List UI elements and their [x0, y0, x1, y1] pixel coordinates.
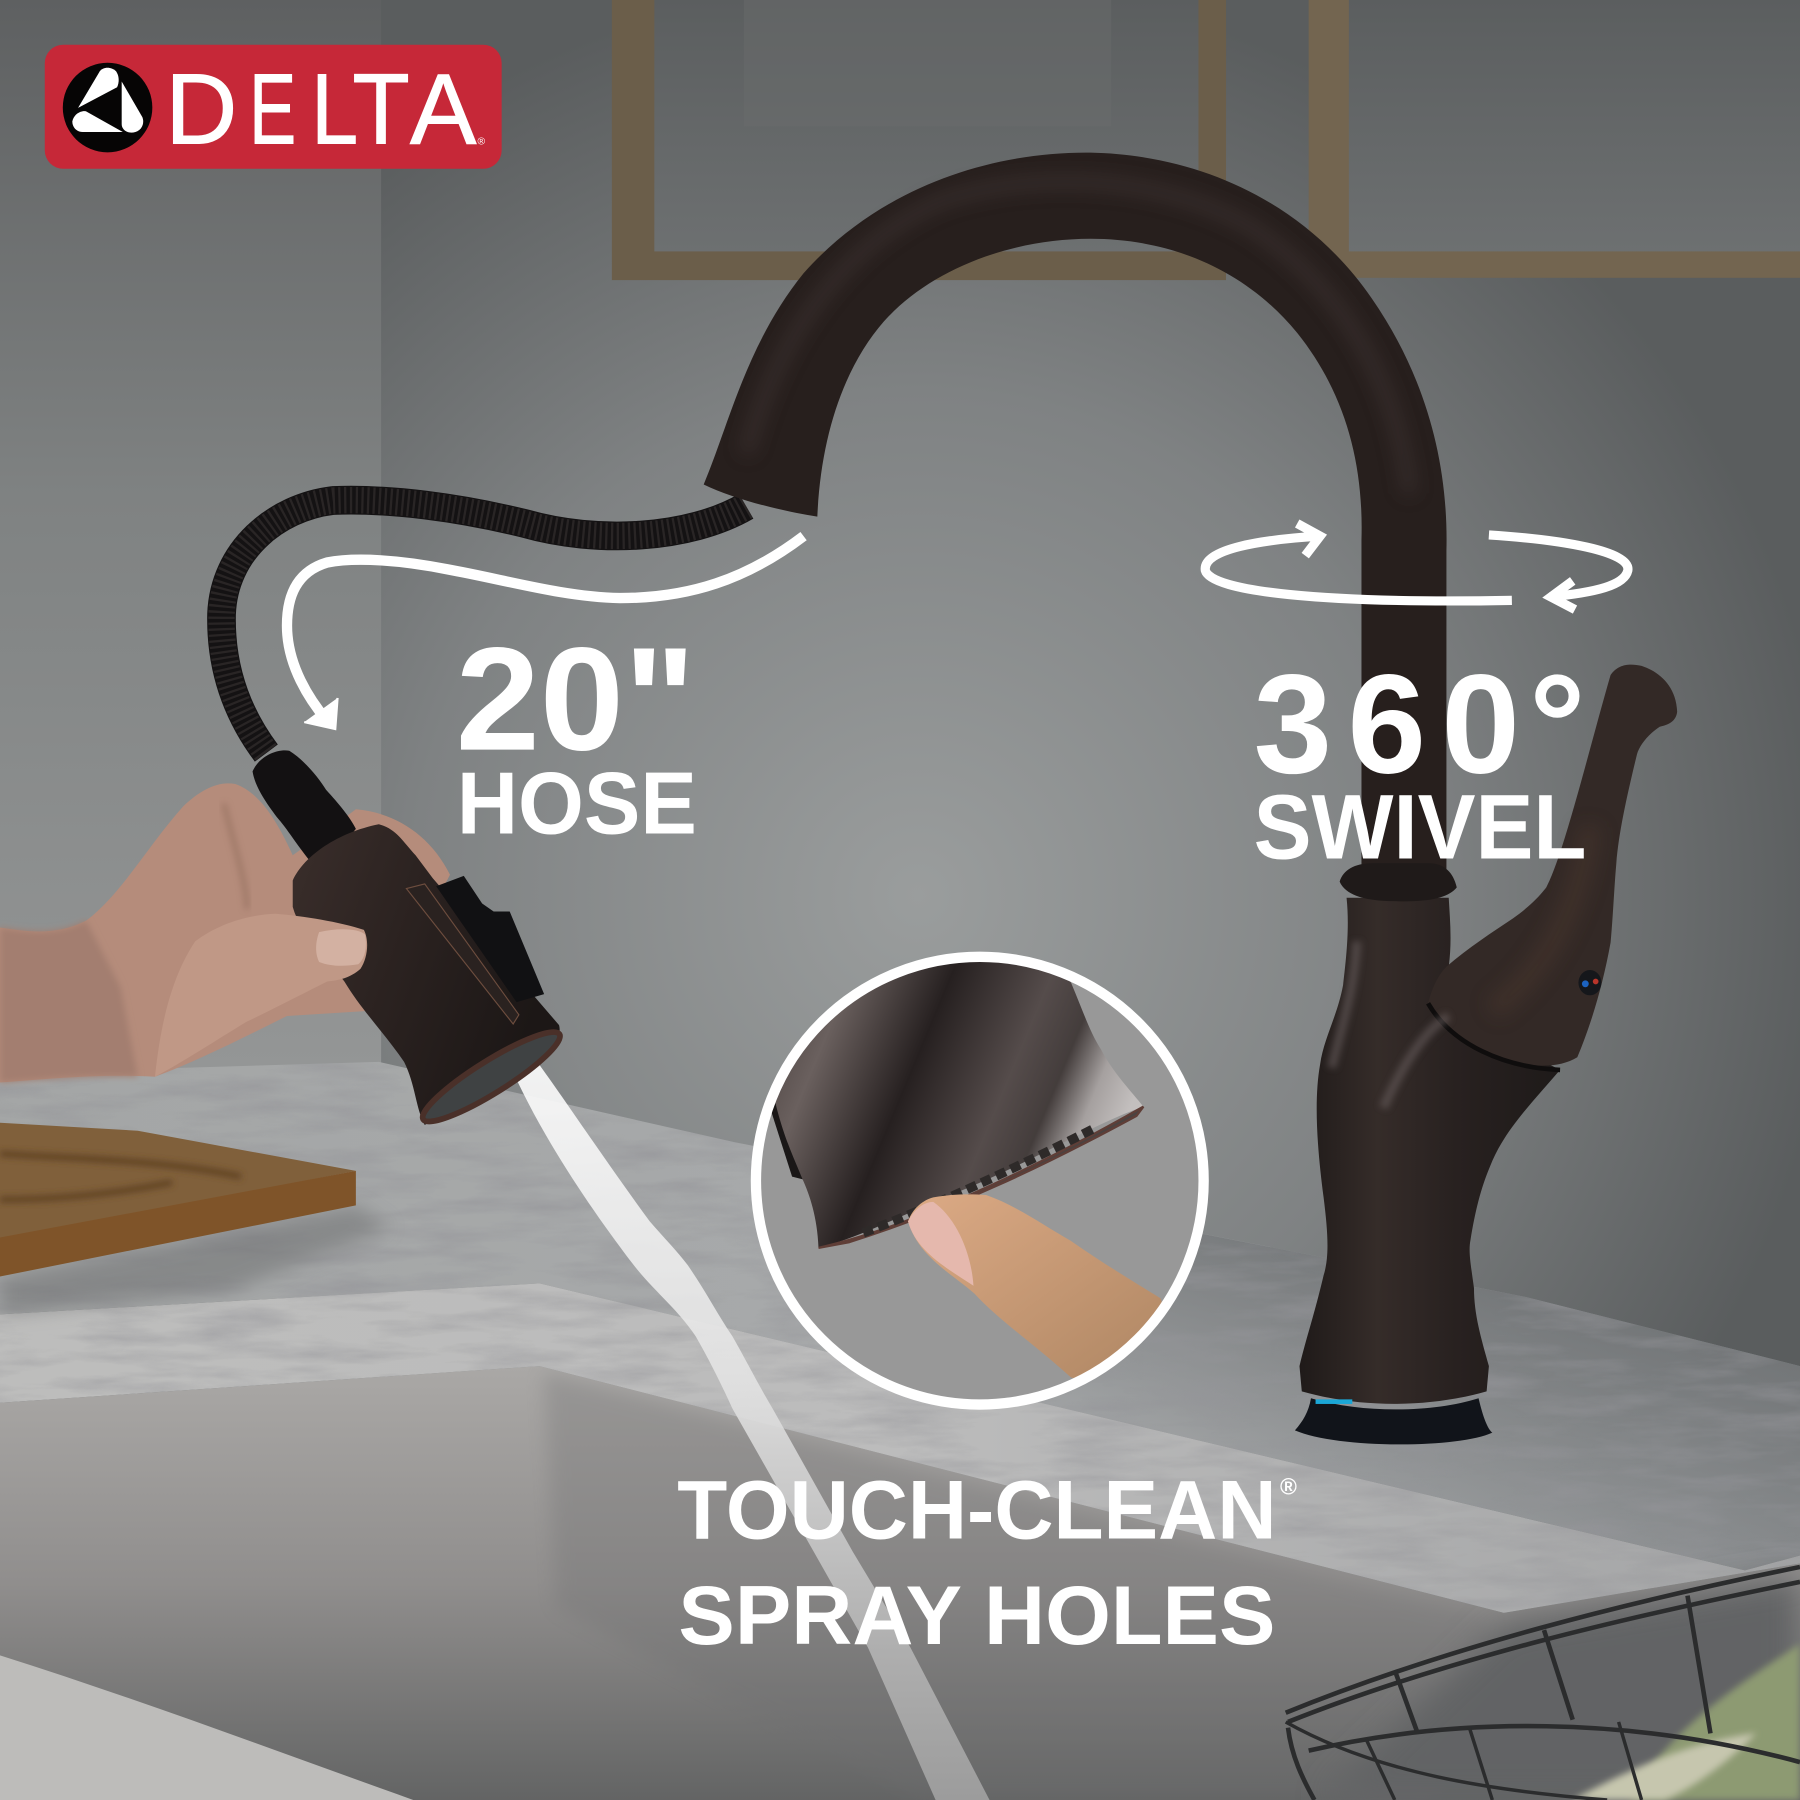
callout: hose [456, 618, 697, 852]
arrowhead [304, 698, 338, 729]
body [1299, 898, 1560, 1404]
callout: swivel [1254, 645, 1586, 879]
finger [908, 1194, 1162, 1378]
lower right counter shade [1320, 1575, 1800, 1800]
logo emblem drops [72, 68, 143, 133]
spout [704, 153, 1447, 872]
spray head [253, 750, 568, 1133]
logo wordmark: L [311, 54, 358, 165]
sink inner corner [544, 1372, 1492, 1800]
sink basin [0, 1366, 1800, 1800]
collar [1340, 863, 1457, 901]
temperature indicator [1578, 970, 1601, 995]
logo wordmark: D [165, 54, 237, 165]
faucet [704, 153, 1677, 1444]
callout: swivel: SWIVEL [1254, 777, 1586, 879]
logo wordmark [165, 54, 477, 165]
callout: touch-clean: TOUCH-CLEAN [677, 1462, 1277, 1556]
body highlights [1332, 941, 1449, 1108]
lens ring [756, 957, 1204, 1405]
callout: hose: HOSE [457, 753, 697, 852]
hose [221, 500, 746, 753]
marble speckles on edge [0, 1289, 1598, 1604]
head body [293, 824, 560, 1125]
touch indicator [1316, 1399, 1352, 1404]
callout: hose: 20" [456, 618, 696, 782]
hand: fingers behind head [0, 783, 450, 1083]
logo background [45, 45, 502, 169]
lever seam [1428, 1003, 1560, 1070]
spray holes [863, 1127, 1096, 1233]
lever shading [1492, 827, 1590, 1010]
logo wordmark: T [352, 54, 410, 165]
countertop front edge [0, 1283, 1800, 1613]
basket greens [1630, 1644, 1800, 1800]
hose connector [253, 750, 356, 861]
spout highlight [746, 182, 1410, 494]
spray face [818, 1107, 1143, 1248]
countertop surface [0, 1062, 1800, 1570]
spray face [415, 1021, 568, 1133]
base escutcheon [1295, 1398, 1492, 1444]
hose braid [221, 500, 746, 753]
registered mark: ® [478, 137, 486, 148]
callout: touch-clean: SPRAY HOLES [678, 1568, 1275, 1662]
ridge [406, 884, 519, 1024]
lever handle [1428, 665, 1677, 1066]
framed picture left [612, 0, 1226, 280]
callout: touch-clean [677, 1462, 1297, 1662]
cutting board shadow [0, 1205, 390, 1314]
framed picture right [1309, 0, 1800, 278]
logo emblem circle [63, 63, 152, 152]
water stream [505, 1054, 990, 1800]
callout: swivel: ° [1529, 645, 1586, 803]
basket pale leaf [1573, 1733, 1756, 1800]
basket [1286, 1567, 1800, 1800]
callout: touch-clean: ® [1280, 1474, 1297, 1500]
mode buttons [436, 876, 544, 1002]
background: left wall [0, 0, 381, 1102]
callout: swivel: 360 [1254, 645, 1520, 803]
magnified spray head [771, 936, 1143, 1248]
countertop back shade [1033, 1201, 1800, 1570]
sink rim foreground [0, 1655, 413, 1800]
fingernail [908, 1202, 973, 1286]
Delta logo [45, 45, 502, 169]
thumbnail [316, 929, 366, 966]
swivel arrows [1205, 523, 1628, 610]
hand: thumb [155, 914, 367, 1077]
logo wordmark: A [410, 54, 477, 165]
hose length arrow [287, 536, 804, 729]
cutting board [0, 1123, 356, 1277]
logo wordmark: E [249, 54, 296, 165]
marble veining [1, 1064, 1800, 1482]
left stub [772, 1103, 802, 1180]
detail lens: touch-clean spray holes [755, 936, 1205, 1406]
lens backdrop [755, 956, 1205, 1406]
